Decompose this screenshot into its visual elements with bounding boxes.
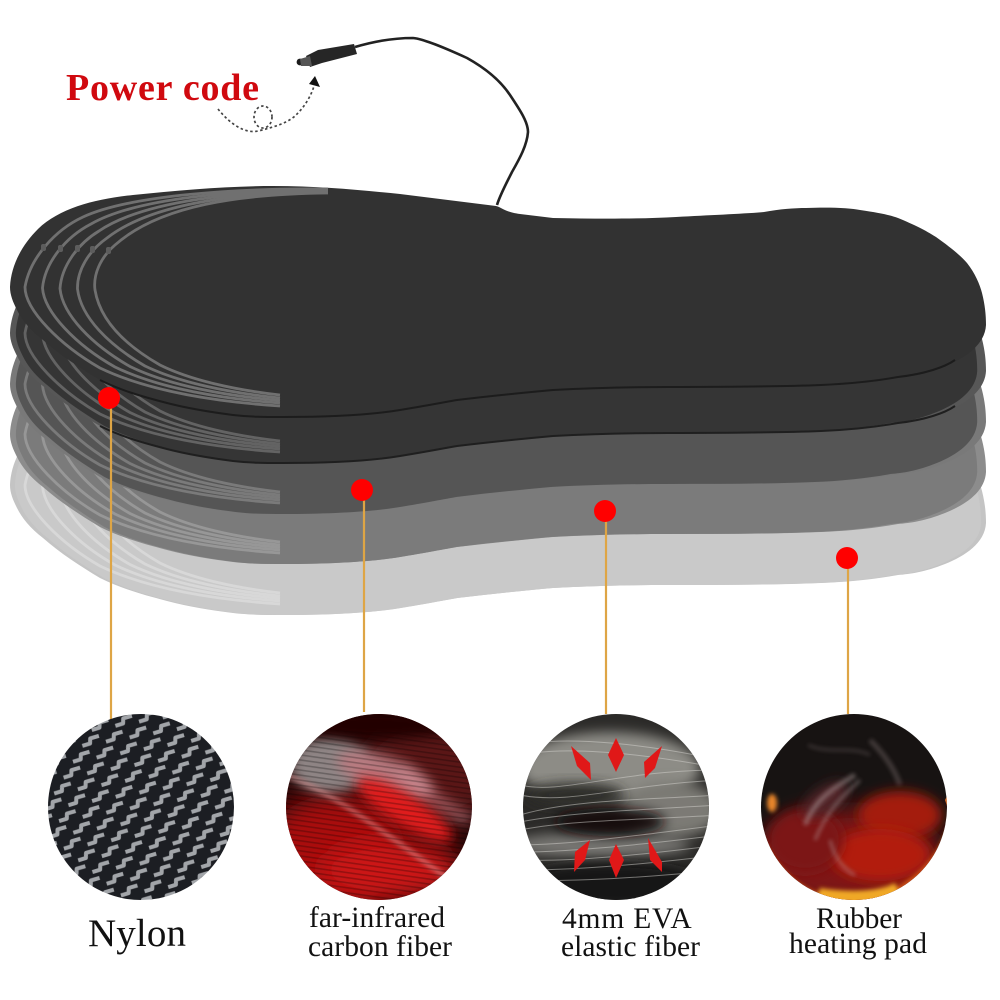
leader line: nylon <box>110 398 112 720</box>
layer 1: top insole <box>10 186 986 417</box>
layer 2: nylon lower sheet <box>10 232 986 463</box>
leader line: EVA <box>605 511 607 714</box>
power cord with connector <box>297 38 528 205</box>
layer 4: EVA elastic fiber <box>10 333 986 564</box>
label: Power code: Power code <box>66 67 259 109</box>
swatch: EVA elastic fiber with red arrows <box>523 714 709 900</box>
marker dot: carbon fiber <box>351 479 373 501</box>
label: Rubber heating pad: Rubber <box>816 903 902 935</box>
marker dot: rubber <box>836 547 858 569</box>
layer 5: rubber heating pad <box>10 384 986 615</box>
label: 4mm EVA elastic fiber: 4mm EVA <box>562 903 692 935</box>
label: 4mm EVA elastic fiber: elastic fiber <box>561 931 700 963</box>
marker dot: EVA <box>594 500 616 522</box>
label: far-infrared carbon fiber: carbon fiber <box>308 931 452 963</box>
swatch: rubber heating pad flames <box>761 714 947 900</box>
label: Rubber heating pad: heating pad <box>789 928 927 960</box>
leader line: rubber <box>847 558 849 714</box>
label: far-infrared carbon fiber: far-infrared <box>309 902 445 934</box>
layer 3: far-infrared carbon fiber <box>10 283 986 514</box>
swatch: nylon weave <box>48 714 234 900</box>
leader line: carbon fiber <box>363 490 365 712</box>
label: Nylon: Nylon <box>88 912 186 955</box>
swatch: red carbon fiber <box>286 714 472 900</box>
arrow: dashed loop to connector <box>218 76 320 132</box>
marker dot: nylon <box>98 387 120 409</box>
